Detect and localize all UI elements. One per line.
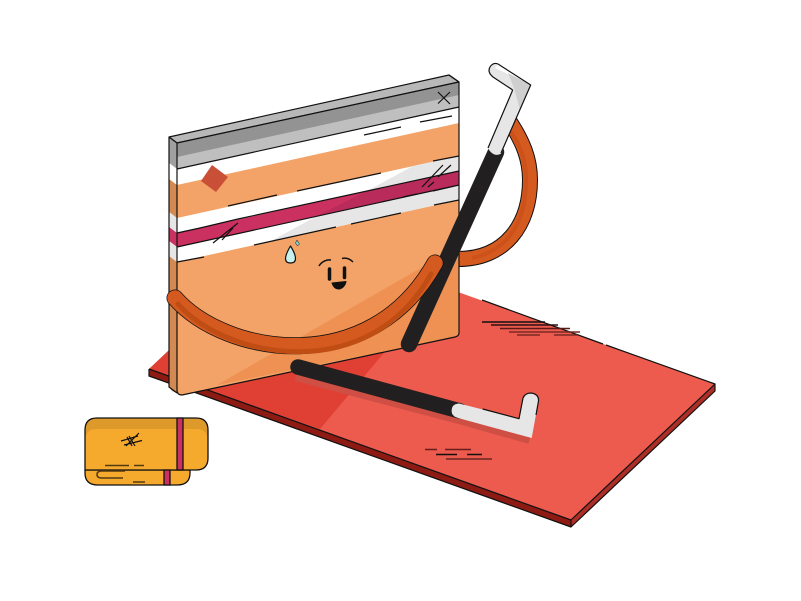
floor scratch marks upper (482, 322, 580, 335)
close icon (438, 92, 450, 104)
ticket slot (97, 471, 145, 482)
icon: sweat drops (286, 240, 300, 263)
lower ticket body (85, 470, 190, 485)
handle shadow on floor (296, 375, 530, 438)
hook bar diagonal (409, 63, 531, 344)
window front face stripes (177, 82, 459, 395)
panel: window (169, 75, 459, 395)
ticket lines (105, 464, 144, 466)
glass scratch left (213, 223, 238, 243)
mug handle arc (458, 116, 530, 259)
orange smile arc (175, 263, 435, 352)
hook bar lying on floor (298, 367, 539, 438)
floor scratch marks lower (425, 450, 492, 459)
upper ticket body (85, 418, 208, 470)
face (319, 258, 353, 289)
panel: red floor slab (149, 233, 715, 527)
window outline (169, 75, 459, 395)
window side face (169, 137, 177, 393)
window top face (169, 75, 459, 143)
crimson bands (177, 418, 183, 470)
glass scratch right (422, 165, 451, 187)
panel: yellow ticket (85, 418, 208, 485)
ticket scratch icon (121, 433, 142, 446)
title bar lines (364, 116, 452, 135)
red diamond icon (201, 165, 228, 192)
